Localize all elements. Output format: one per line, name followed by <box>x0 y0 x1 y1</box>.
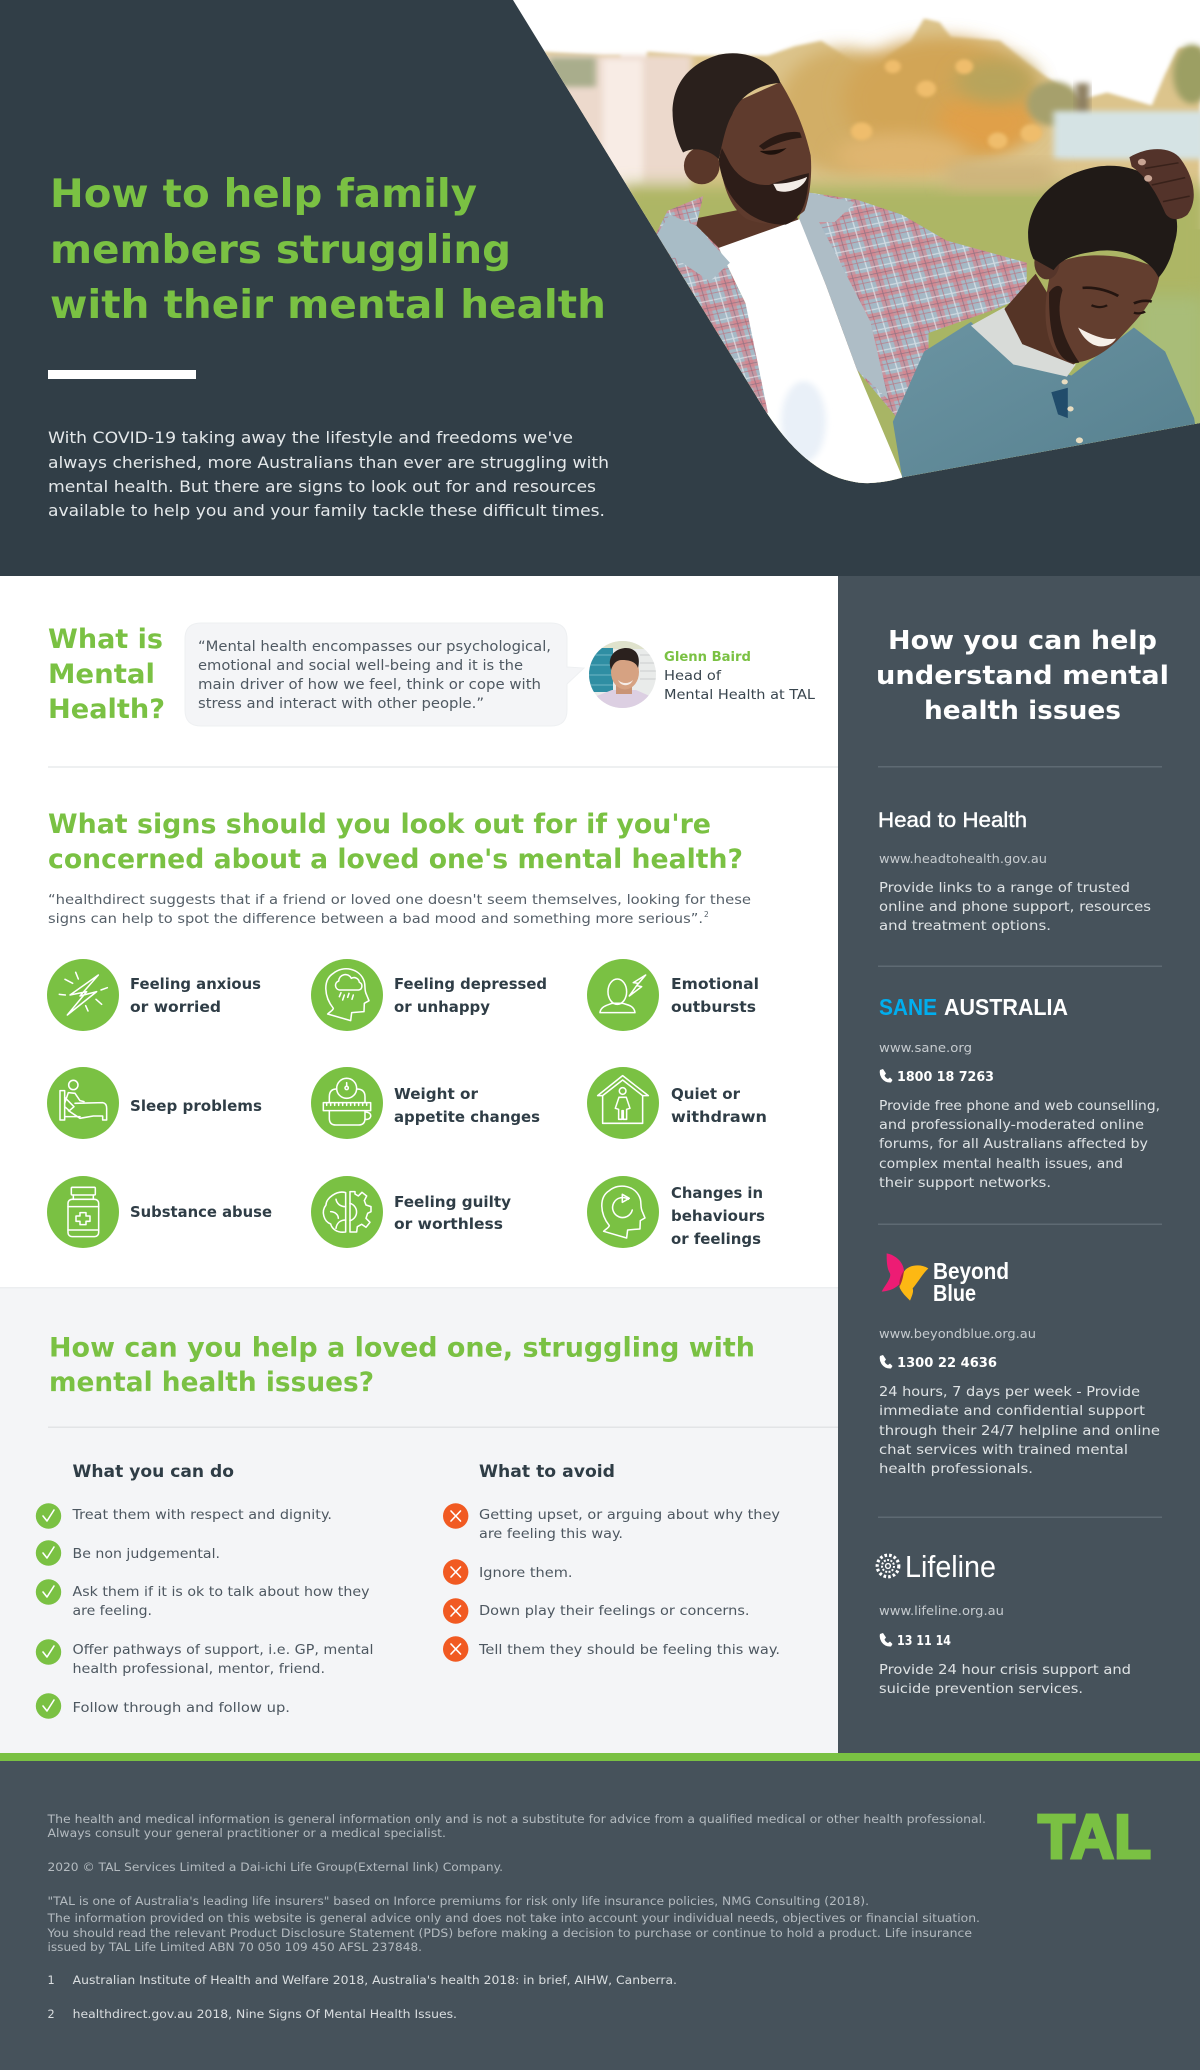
sign: feeling guilty <box>311 1176 511 1248</box>
green divider band <box>0 1753 1200 1761</box>
footer panel <box>0 1761 1200 2070</box>
footnotes <box>48 1974 677 2021</box>
icon: head with circular arrow <box>602 1186 645 1238</box>
sign: sleep problems: Sleep problems <box>130 1097 262 1115</box>
icon: brain and gear <box>323 1192 371 1232</box>
panel: what is mental health <box>48 623 816 726</box>
healthdirect intro text: 2 <box>704 910 709 919</box>
resource: Head to Health: online and phone support, resources <box>879 899 1151 915</box>
icon: scale with tape measure <box>323 1078 371 1125</box>
heading: how can you help a loved one: How can you help a loved one, struggling with <box>49 1332 755 1364</box>
hero intro paragraph: available to help you and your family tackle these difficult times. <box>48 501 605 520</box>
heading: what is mental health: Health? <box>48 694 165 725</box>
resource: Lifeline: Lifeline <box>905 1549 996 1584</box>
resource: SANE Australia: complex mental health issues, and <box>879 1156 1123 1172</box>
resource: Beyond Blue: 24 hours, 7 days per week - Provide <box>879 1384 1140 1400</box>
check item 3 <box>36 1579 370 1619</box>
speaker caption: Mental Health at TAL <box>664 687 816 703</box>
hero photo: two men smiling outdoors <box>513 0 1200 484</box>
resource: Lifeline <box>877 1549 1131 1697</box>
resource: SANE Australia: www.sane.org <box>879 1040 972 1055</box>
quote speech bubble: “Mental health encompasses our psychological, <box>198 639 551 655</box>
check item 5: Follow through and follow up. <box>72 1700 290 1716</box>
hero panel <box>0 0 1200 580</box>
check item 4: health professional, mentor, friend. <box>72 1661 325 1677</box>
title divider bar <box>48 370 196 379</box>
heading: what is mental health: What is <box>48 624 163 655</box>
resource: Lifeline: Provide 24 hour crisis support and <box>879 1662 1131 1678</box>
resource: Head to Health: and treatment options. <box>879 918 1051 934</box>
panel: how can you help <box>0 1287 838 1753</box>
sign: weight or appetite changes: appetite changes <box>394 1108 540 1126</box>
icon: medicine bottle <box>68 1187 99 1237</box>
cross item 4: Tell them they should be feeling this way. <box>478 1642 780 1658</box>
quote speech bubble <box>185 623 584 726</box>
resource: Beyond Blue: 1300 22 4636 <box>897 1355 997 1371</box>
sidebar heading: understand mental <box>876 661 1169 691</box>
icon: person with bolt <box>600 975 646 1013</box>
icon: head with rain cloud <box>326 969 369 1021</box>
heading: what is mental health <box>48 624 165 725</box>
resource: SANE Australia <box>879 994 1160 1191</box>
cross item 2: Ignore them. <box>479 1565 572 1581</box>
resource: Beyond Blue <box>879 1253 1160 1477</box>
check item 1 <box>36 1503 332 1529</box>
quote speech bubble: stress and interact with other people.” <box>198 696 484 712</box>
sidebar heading: How you can help <box>888 626 1157 656</box>
icon: person in bed <box>60 1080 107 1120</box>
disclaimer text <box>46 1813 986 1954</box>
cross item 3 <box>443 1598 750 1624</box>
disclaimer text: The information provided on this website is general advice only and does not take into account your individual needs, objectives or financial situation. <box>46 1912 980 1925</box>
hero intro paragraph: With COVID-19 taking away the lifestyle and freedoms we've <box>48 428 573 447</box>
sign: quiet or withdrawn <box>587 1067 767 1139</box>
resource: Beyond Blue: www.beyondblue.org.au <box>879 1326 1036 1341</box>
cross item 4 <box>443 1636 780 1662</box>
heading: signs <box>48 809 743 875</box>
check item 3: Ask them if it is ok to talk about how they <box>72 1584 370 1600</box>
hero intro paragraph: always cherished, more Australians than ever are struggling with <box>48 453 609 472</box>
resource: Head to Health: www.headtohealth.gov.au <box>879 851 1047 866</box>
quote speech bubble: main driver of how we feel, think or cope with <box>198 677 541 693</box>
disclaimer text: issued by TAL Life Limited ABN 70 050 109 450 AFSL 237848. <box>48 1941 422 1954</box>
resource: Beyond Blue: through their 24/7 helpline and online <box>879 1423 1160 1439</box>
cross item 1: Getting upset, or arguing about why they <box>479 1507 780 1523</box>
healthdirect intro text <box>48 892 751 927</box>
column: what you can do <box>36 1462 373 1719</box>
sign: emotional outbursts: outbursts <box>671 998 756 1016</box>
hero title: How to help family <box>50 172 477 217</box>
panel: signs to look out for <box>47 809 767 1248</box>
resource: Lifeline: www.lifeline.org.au <box>879 1603 1004 1618</box>
sign: sleep problems <box>47 1067 262 1139</box>
heading: how can you help a loved one: mental health issues? <box>49 1367 374 1398</box>
resource: Beyond Blue: health professionals. <box>879 1461 1033 1477</box>
man two <box>893 149 1196 488</box>
cross item 1: are feeling this way. <box>479 1526 623 1542</box>
speaker caption: Glenn Baird <box>664 650 751 665</box>
sign: changes in behaviours <box>587 1176 765 1248</box>
resource: Beyond Blue: Blue <box>933 1280 976 1306</box>
speaker caption: Head of <box>664 668 722 684</box>
hero title: with their mental health <box>50 283 606 328</box>
sign: emotional outbursts <box>587 959 759 1031</box>
disclaimer text: Always consult your general practitioner or a medical specialist. <box>48 1827 446 1840</box>
sign: feeling guilty: or worthless <box>394 1215 503 1233</box>
check item 4: Offer pathways of support, i.e. GP, mental <box>72 1642 373 1658</box>
sign: feeling guilty: Feeling guilty <box>394 1193 511 1211</box>
man one <box>652 53 1027 496</box>
cross item 2 <box>443 1559 572 1585</box>
check item 2: Be non judgemental. <box>72 1546 220 1562</box>
healthdirect intro text: “healthdirect suggests that if a friend or loved one doesn't seem themselves, looking for these <box>48 892 751 908</box>
disclaimer text: The health and medical information is general information only and is not a substitute for advice from a qualified medical or other health professional. <box>46 1813 986 1826</box>
heading: how can you help a loved one <box>49 1332 755 1398</box>
column: what to avoid: What to avoid <box>479 1462 615 1482</box>
icon: lightning bolt <box>59 972 107 1015</box>
icon: phone <box>880 1355 892 1369</box>
sign: quiet or withdrawn: Quiet or <box>671 1085 740 1103</box>
resource: Head to Health: Head to Health <box>878 808 1027 832</box>
resource: SANE Australia: Provide free phone and web counselling, <box>879 1098 1160 1114</box>
hero title: members struggling <box>50 228 511 273</box>
resource: SANE Australia: AUSTRALIA <box>944 994 1068 1020</box>
disclaimer text: 2020 © TAL Services Limited a Dai-ichi Life Group(External link) Company. <box>48 1861 503 1874</box>
hero title <box>50 172 606 328</box>
sign: weight or appetite changes: Weight or <box>394 1085 478 1103</box>
footnotes: Australian Institute of Health and Welfare 2018, Australia's health 2018: in brief, AIHW, Canberra. <box>73 1974 677 1987</box>
sign: substance abuse <box>47 1176 272 1248</box>
resource: Head to Health <box>878 808 1151 934</box>
portrait of Glenn Baird <box>589 641 657 709</box>
footnotes: 1 <box>48 1974 55 1987</box>
heading: signs: concerned about a loved one's mental health? <box>48 844 743 875</box>
heading: what is mental health: Mental <box>48 659 155 690</box>
resource: Beyond Blue: chat services with trained mental <box>879 1442 1128 1458</box>
sidebar: how you can help understand mental health issues <box>838 576 1200 1753</box>
sign: feeling anxious <box>47 959 261 1031</box>
sign: feeling depressed: or unhappy <box>394 998 490 1016</box>
check item 5 <box>36 1693 290 1719</box>
sign: substance abuse: Substance abuse <box>130 1203 272 1221</box>
check item 2 <box>36 1540 220 1566</box>
sign: quiet or withdrawn: withdrawn <box>671 1108 767 1126</box>
resource: Head to Health: Provide links to a range of trusted <box>879 880 1130 896</box>
resource: Lifeline: 13 11 14 <box>897 1633 951 1649</box>
sign: feeling anxious: or worried <box>130 998 221 1016</box>
icon: person in house <box>598 1076 648 1123</box>
logo: butterfly <box>882 1253 928 1301</box>
column: what to avoid <box>443 1462 780 1662</box>
cross item 1 <box>443 1503 780 1542</box>
icon: phone <box>880 1633 892 1647</box>
footnotes: 2 <box>48 2008 55 2021</box>
disclaimer text: You should read the relevant Product Disclosure Statement (PDS) before making a decision to purchase or continue to hold a product. Life insurance <box>46 1927 972 1940</box>
resource: Beyond Blue: Beyond <box>933 1258 1009 1284</box>
check item 1: Treat them with respect and dignity. <box>71 1507 332 1523</box>
logo: TAL: TAL <box>1038 1803 1151 1872</box>
sign: changes in behaviours: or feelings <box>671 1230 761 1248</box>
sign: feeling depressed <box>311 959 547 1031</box>
quote speech bubble: emotional and social well-being and it is the <box>198 658 523 674</box>
resource: SANE Australia: 1800 18 7263 <box>897 1069 994 1085</box>
sidebar heading: health issues <box>924 696 1121 726</box>
column: what you can do: What you can do <box>72 1462 234 1482</box>
resource: SANE Australia: and professionally-moderated online <box>879 1117 1144 1133</box>
logo: Lifeline dotted circle <box>877 1555 899 1577</box>
heading: signs: What signs should you look out for if you're <box>48 809 711 840</box>
sign: feeling anxious: Feeling anxious <box>130 975 261 993</box>
disclaimer text: "TAL is one of Australia's leading life insurers" based on Inforce premiums for risk only life insurance policies, NMG Consulting (2018). <box>48 1895 869 1908</box>
resource: SANE Australia: their support networks. <box>879 1175 1051 1191</box>
sign: weight or appetite changes <box>311 1067 540 1139</box>
resource: Beyond Blue: immediate and confidential support <box>879 1403 1145 1419</box>
hero intro paragraph <box>48 428 609 520</box>
sign: feeling depressed: Feeling depressed <box>394 975 547 993</box>
resource: Lifeline: suicide prevention services. <box>879 1681 1083 1697</box>
hero intro paragraph: mental health. But there are signs to look out for and resources <box>48 477 596 496</box>
healthdirect intro text: signs can help to spot the difference between a bad mood and something more serious”. <box>48 911 703 927</box>
footnotes: healthdirect.gov.au 2018, Nine Signs Of Mental Health Issues. <box>73 2008 457 2021</box>
sign: changes in behaviours: behaviours <box>671 1207 765 1225</box>
icon: phone <box>880 1069 892 1083</box>
resource: SANE Australia: SANE <box>879 994 937 1020</box>
check item 4 <box>36 1639 373 1677</box>
cross item 3: Down play their feelings or concerns. <box>479 1603 750 1619</box>
resource: SANE Australia: forums, for all Australians affected by <box>879 1136 1148 1152</box>
sign: changes in behaviours: Changes in <box>671 1184 763 1202</box>
speaker caption <box>664 650 816 703</box>
sign: emotional outbursts: Emotional <box>671 975 759 993</box>
sidebar heading <box>876 626 1169 726</box>
check item 3: are feeling. <box>72 1603 152 1619</box>
